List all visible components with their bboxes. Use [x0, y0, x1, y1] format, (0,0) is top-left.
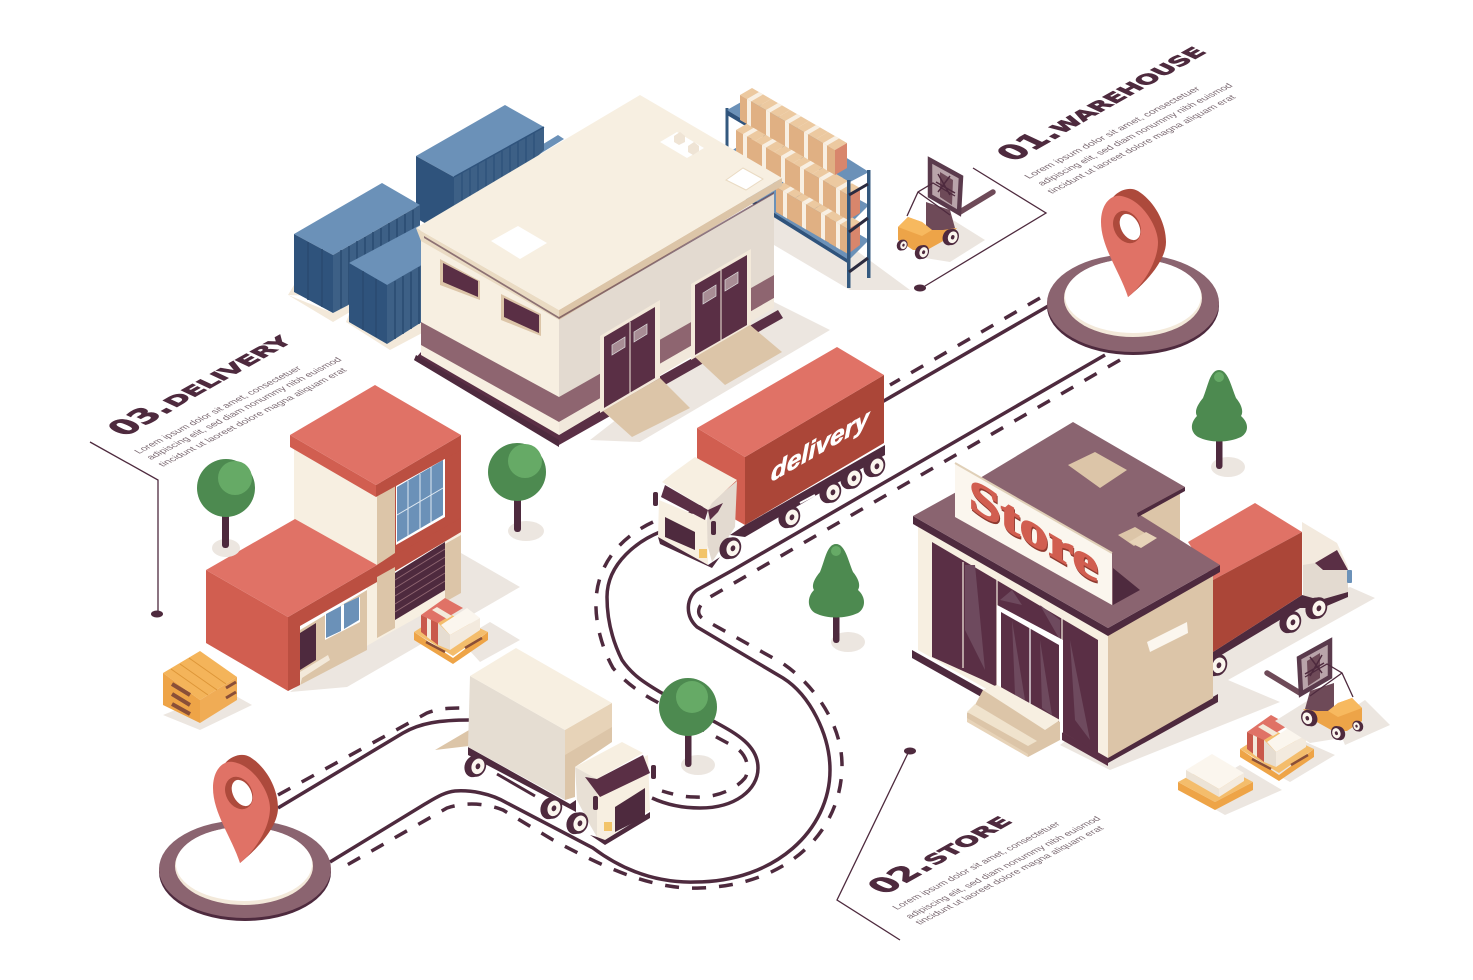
- route: warehouse to store roads: [278, 298, 1120, 888]
- cab: [653, 457, 737, 568]
- body text: adipiscing elit, sed diam nonummy nibh euismod: [144, 356, 345, 462]
- tree: round left: [197, 459, 255, 557]
- sign lettering: Store: [969, 467, 1098, 593]
- cargo box: [697, 428, 745, 525]
- entrance door: [997, 605, 1063, 733]
- roof hatches: [1068, 452, 1127, 488]
- map pin: delivery: [213, 755, 278, 863]
- chassis: [730, 445, 885, 537]
- location ring: warehouse: [1047, 254, 1219, 355]
- upper roof: [290, 435, 376, 497]
- container: front: [349, 225, 425, 344]
- pallet with crates: store: [1240, 715, 1314, 781]
- heading: DELIVERY: [158, 333, 299, 410]
- rear wheels: [775, 453, 888, 531]
- wall vent: [1147, 622, 1188, 652]
- label: 02 store: [858, 814, 1107, 927]
- front wall: [918, 525, 1108, 758]
- body text: tincidunt ut laoreet dolore magna aliquam erat: [156, 367, 350, 469]
- body text: tincidunt ut laoreet dolore magna aliquam erat: [913, 825, 1107, 927]
- shipping containers: [288, 105, 564, 350]
- body text: adipiscing elit, sed diam nonummy nibh euismod: [903, 815, 1104, 921]
- forklift: store: [1267, 641, 1365, 743]
- front wheel: [563, 810, 591, 837]
- wooden pallet stack: [163, 651, 237, 723]
- warehouse building: [414, 95, 783, 447]
- ground shadows: [163, 190, 1390, 815]
- body text: tincidunt ut laoreet dolore magna aliquam erat: [1045, 94, 1239, 196]
- heading: [98, 333, 299, 440]
- pallet with crates: house: [414, 598, 488, 664]
- left wall: [421, 238, 559, 435]
- heading: 03.: [98, 396, 182, 440]
- sign lettering shadow: Store: [970, 469, 1099, 595]
- storage shelf with boxes: [727, 88, 870, 288]
- house: [206, 385, 461, 691]
- side wall: [1108, 573, 1213, 758]
- cargo box: [468, 676, 565, 800]
- heading: [987, 44, 1212, 165]
- heading: WAREHOUSE: [1045, 44, 1212, 136]
- forklift: warehouse: [895, 160, 993, 262]
- tree: round centre: [488, 443, 546, 541]
- cast shadow: [435, 730, 469, 750]
- loading ramps: [603, 378, 690, 437]
- tree: pine centre: [809, 544, 865, 652]
- garage door: [395, 542, 445, 620]
- base: [912, 650, 983, 698]
- roof hatches: [491, 226, 547, 259]
- tree: pine right: [1192, 370, 1247, 477]
- door right: [691, 249, 751, 360]
- entrance steps: [967, 685, 1060, 757]
- panoramic window: [396, 458, 445, 545]
- label: 01 warehouse: [987, 44, 1239, 196]
- roof: [913, 516, 1220, 636]
- leader line: store: [837, 748, 916, 940]
- tree: round front: [659, 678, 717, 775]
- body text: Lorem ipsum dolor sit amet, consectetuer: [132, 365, 305, 456]
- body text: adipiscing elit, sed diam nonummy nibh euismod: [1035, 82, 1236, 188]
- lower block: [288, 565, 377, 691]
- roof: [416, 228, 559, 320]
- cab: [575, 742, 656, 845]
- location ring: delivery: [159, 820, 331, 921]
- heading: [858, 814, 1018, 898]
- container: left: [294, 183, 420, 313]
- label: 03 delivery: [98, 333, 350, 469]
- chassis: [468, 747, 576, 812]
- rear wheels: [461, 753, 565, 822]
- heading: 02.: [858, 854, 942, 898]
- shop glazing: [932, 542, 1098, 753]
- right wall: [559, 193, 774, 435]
- body text: Lorem ipsum dolor sit amet, consectetuer: [890, 820, 1064, 912]
- leader line: warehouse: [914, 168, 1046, 292]
- front wheel: [716, 535, 744, 562]
- store building: [912, 422, 1220, 766]
- front door: [300, 623, 316, 670]
- windows: [440, 259, 480, 300]
- heading: STORE: [918, 814, 1018, 868]
- container: back: [416, 105, 544, 240]
- cream delivery truck: [435, 648, 656, 845]
- lower window: [325, 597, 360, 640]
- body text: Lorem ipsum dolor sit amet, consectetuer: [1022, 85, 1203, 181]
- lower storey: [300, 530, 461, 685]
- rear wall: [1138, 490, 1180, 535]
- delivery lettering: delivery: [771, 403, 871, 488]
- heading: 01.: [987, 122, 1070, 165]
- red delivery truck: [653, 347, 888, 568]
- sign board: [955, 463, 1112, 605]
- leader line: delivery: [90, 442, 163, 618]
- upper floor walls: [294, 448, 377, 565]
- map pin: warehouse: [1101, 189, 1166, 297]
- pallet with white crates: [1178, 754, 1253, 810]
- door left: [600, 300, 660, 413]
- truck behind store: [1188, 503, 1352, 679]
